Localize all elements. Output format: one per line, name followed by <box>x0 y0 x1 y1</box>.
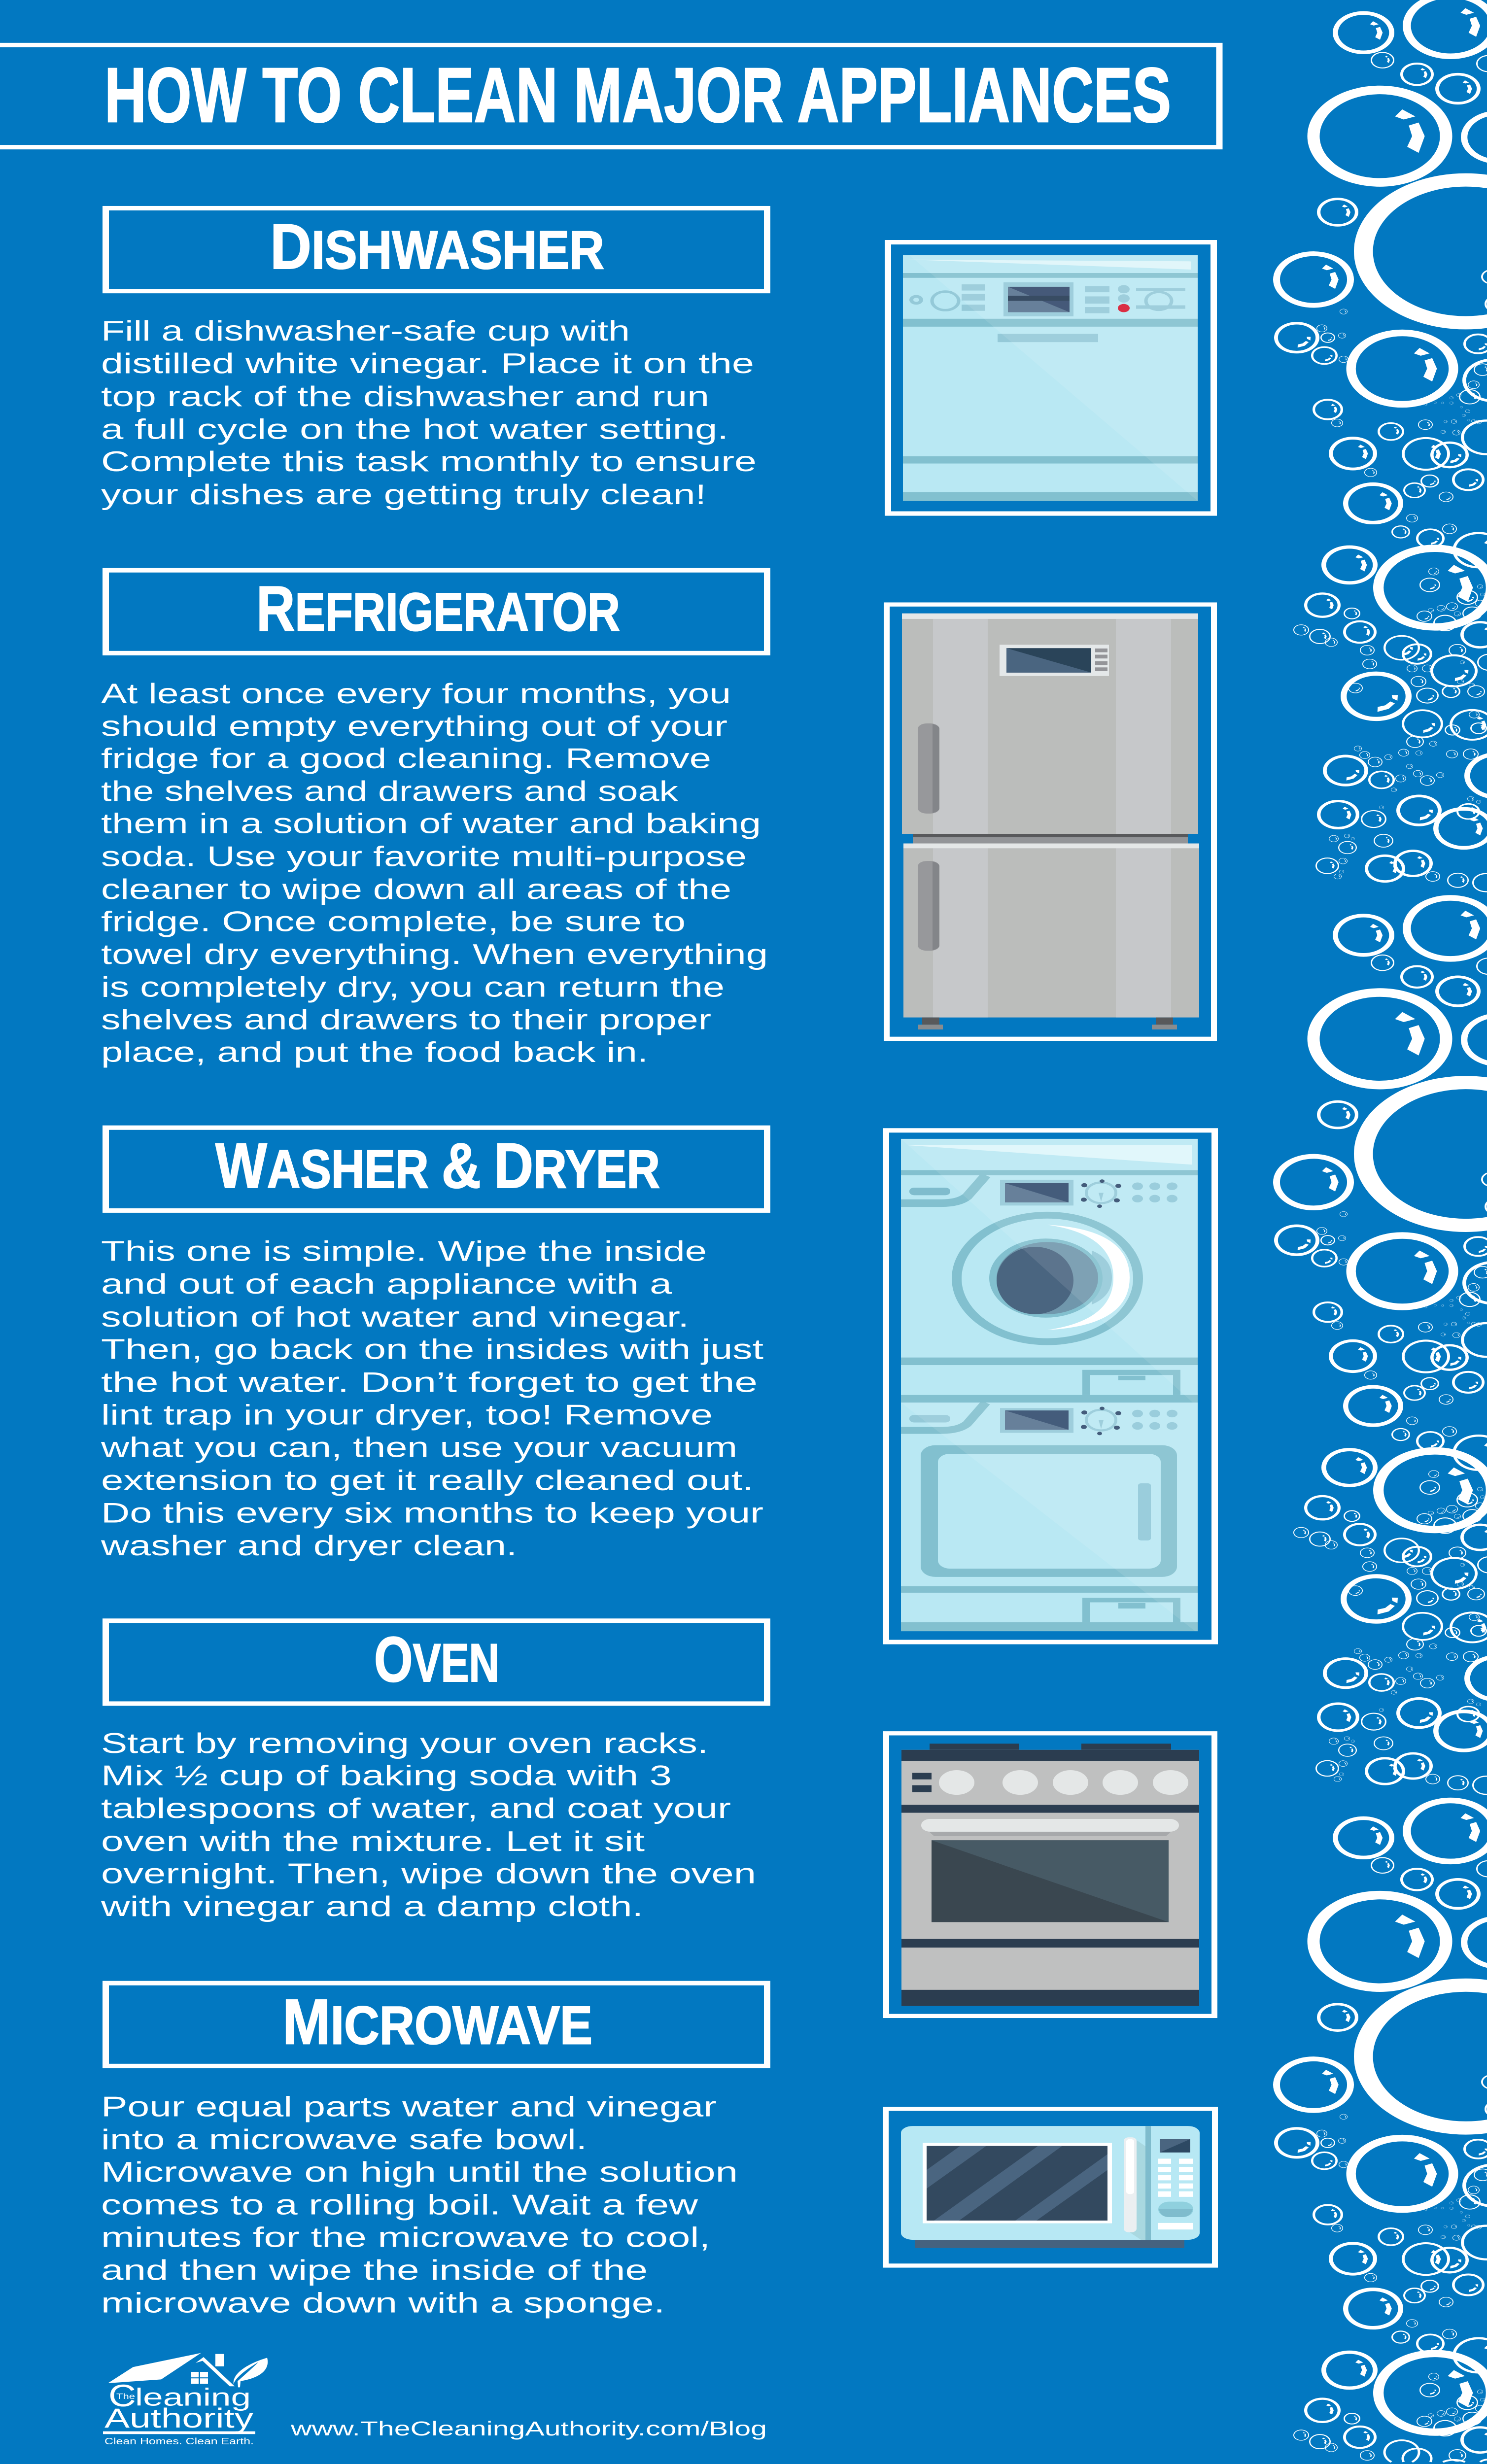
text: washer and dryer instructions: what you can, then use your vacuum <box>101 1432 737 1463</box>
illustration: dishwasher <box>888 242 1213 513</box>
logo: The Cleaning Authority: leaning <box>135 2384 251 2411</box>
text: refrigerator instructions: shelves and drawers to their proper <box>101 1004 711 1035</box>
illustration: washer and dryer <box>886 1130 1214 1642</box>
heading: oven: OVEN <box>374 1624 499 1695</box>
text: dishwasher instructions: distilled white vinegar. Place it on the <box>101 347 754 379</box>
text: washer and dryer instructions: Do this every six months to keep your <box>101 1497 763 1529</box>
text: refrigerator instructions: is completely dry, you can return the <box>101 971 725 1003</box>
text: oven instructions: oven with the mixture. Let it sit <box>101 1825 645 1857</box>
illustration: microwave <box>886 2109 1215 2265</box>
text: washer and dryer instructions: Then, go back on the insides with just <box>101 1334 763 1365</box>
text: dishwasher instructions: a full cycle on the hot water setting. <box>101 413 728 445</box>
decorative bubble column <box>1276 0 1487 2462</box>
text: refrigerator instructions: them in a solution of water and baking <box>101 808 761 839</box>
logo: The Cleaning Authority: The <box>116 2393 135 2401</box>
text: oven instructions: overnight. Then, wipe down the oven <box>101 1858 756 1889</box>
text: microwave instructions: Microwave on high until the solution <box>101 2156 738 2188</box>
heading: microwave: MICROWAVE <box>282 1986 592 2057</box>
text: refrigerator instructions: should empty everything out of your <box>101 710 727 742</box>
text: microwave instructions: and then wipe the inside of the <box>101 2254 648 2286</box>
section: microwave <box>101 1983 1215 2318</box>
text: washer and dryer instructions: washer and dryer clean. <box>101 1530 517 1561</box>
illustration: refrigerator <box>887 605 1214 1039</box>
illustration: oven <box>886 1733 1214 2016</box>
text: refrigerator instructions: fridge. Once complete, be sure to <box>101 906 686 937</box>
text: washer and dryer instructions: and out of each appliance with a <box>101 1268 672 1300</box>
section: washer and dryer <box>101 1128 1214 1642</box>
heading: refrigerator <box>105 570 767 653</box>
text: washer and dryer instructions: extension to get it really cleaned out. <box>101 1465 754 1496</box>
text: refrigerator instructions: fridge for a good cleaning. Remove <box>101 743 711 774</box>
text: dishwasher instructions <box>101 315 757 510</box>
text: oven instructions <box>101 1727 756 1922</box>
heading: dishwasher <box>105 208 767 291</box>
text: refrigerator instructions: At least once every four months, you <box>101 678 731 709</box>
text: oven instructions: Mix ½ cup of baking soda with 3 <box>101 1760 672 1791</box>
text: refrigerator instructions: cleaner to wipe down all areas of the <box>101 873 731 905</box>
text: oven instructions: with vinegar and a damp cloth. <box>101 1890 643 1922</box>
text: dishwasher instructions: Complete this task monthly to ensure <box>101 445 757 477</box>
heading: refrigerator: REFRIGERATOR <box>256 573 620 644</box>
text: microwave instructions <box>101 2091 738 2318</box>
text: washer and dryer instructions <box>101 1235 763 1561</box>
heading: oven <box>105 1621 767 1704</box>
text: refrigerator instructions: towel dry everything. When everything <box>101 938 768 970</box>
text: refrigerator instructions: soda. Use your favorite multi-purpose <box>101 841 747 872</box>
text: microwave instructions: Pour equal parts water and vinegar <box>101 2091 717 2122</box>
heading: microwave <box>105 1983 767 2066</box>
text: refrigerator instructions: place, and put the food back in. <box>101 1036 648 1068</box>
text: dishwasher instructions: your dishes are getting truly clean! <box>101 479 706 510</box>
text: microwave instructions: into a microwave safe bowl. <box>101 2123 587 2155</box>
heading: washer and dryer <box>105 1128 767 1210</box>
website url: www.TheCleaningAuthority.com/Blog <box>290 2418 767 2440</box>
logo: The Cleaning Authority: Authority <box>104 2403 254 2433</box>
text: dishwasher instructions: top rack of the dishwasher and run <box>101 380 709 412</box>
section: dishwasher <box>101 208 1213 513</box>
text: oven instructions: Start by removing your oven racks. <box>101 1727 708 1759</box>
heading: washer and dryer: WASHER & DRYER <box>215 1130 660 1201</box>
logo: The Cleaning Authority: Clean Homes. Clean Earth. <box>104 2436 254 2446</box>
text: washer and dryer instructions: This one is simple. Wipe the inside <box>101 1235 707 1267</box>
text: microwave instructions: minutes for the microwave to cool, <box>101 2222 710 2253</box>
heading: dishwasher: DISHWASHER <box>270 211 604 282</box>
logo: The Cleaning Authority <box>103 2353 268 2446</box>
text: washer and dryer instructions: lint trap in your dryer, too! Remove <box>101 1399 713 1431</box>
title <box>0 45 1219 147</box>
text: microwave instructions: comes to a rolling boil. Wait a few <box>101 2189 698 2221</box>
text: washer and dryer instructions: solution of hot water and vinegar. <box>101 1301 689 1333</box>
section: refrigerator <box>101 570 1214 1068</box>
text: washer and dryer instructions: the hot water. Don’t forget to get the <box>101 1367 758 1398</box>
section: oven <box>101 1621 1214 2016</box>
icon: house roof and leaf <box>108 2353 268 2387</box>
text: oven instructions: tablespoons of water, and coat your <box>101 1792 731 1824</box>
text: refrigerator instructions <box>101 678 768 1068</box>
text: refrigerator instructions: the shelves and drawers and soak <box>101 775 679 807</box>
logo: The Cleaning Authority: C <box>108 2379 136 2413</box>
text: microwave instructions: microwave down with a sponge. <box>101 2287 665 2318</box>
text: dishwasher instructions: Fill a dishwasher-safe cup with <box>101 315 630 346</box>
